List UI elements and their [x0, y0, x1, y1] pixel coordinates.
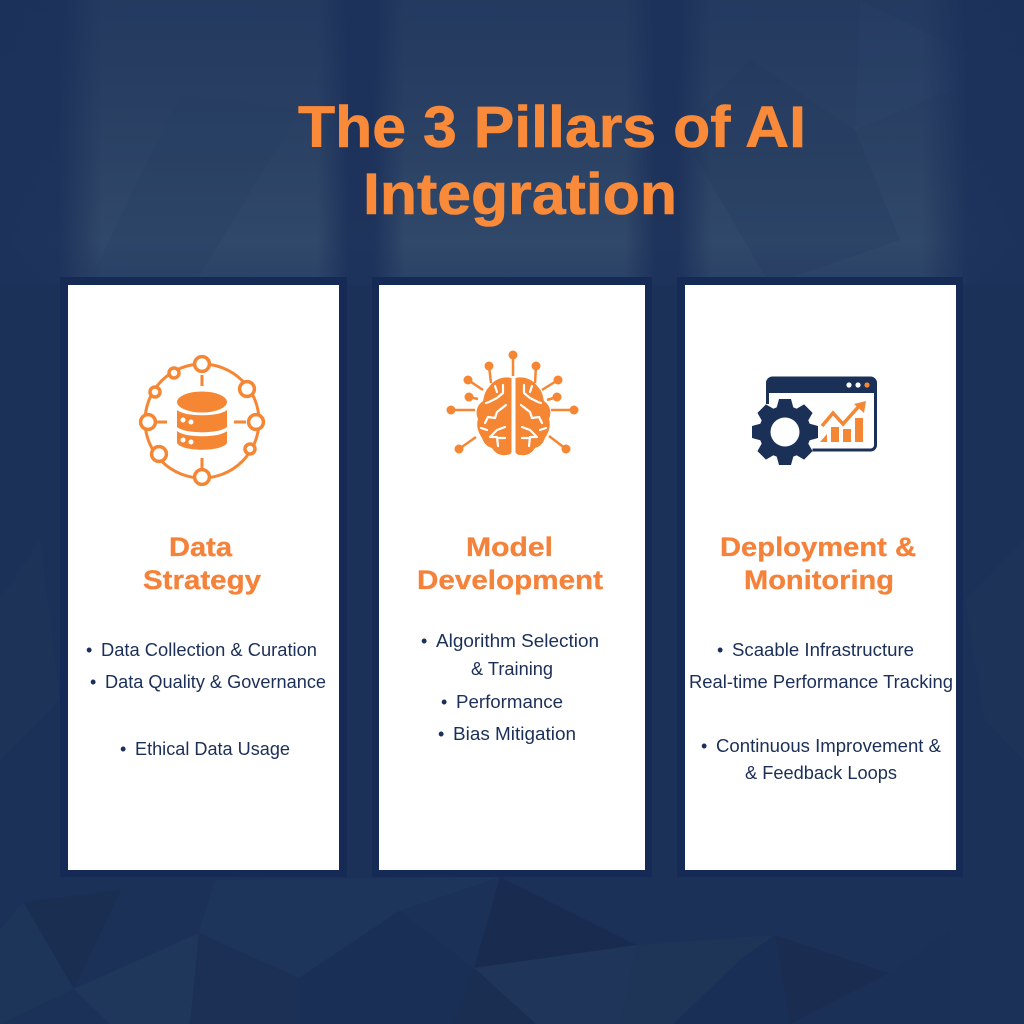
bullet list: •: [701, 736, 707, 756]
bullet list: Performance: [456, 692, 563, 712]
bullet list: Bias Mitigation: [453, 724, 576, 744]
heading: [143, 532, 261, 595]
bullet list: [689, 640, 953, 783]
title: [298, 95, 806, 227]
bullet list: •: [120, 739, 126, 759]
icon: database network: [141, 357, 263, 484]
heading: [720, 532, 916, 595]
bullet list: Data Collection & Curation: [101, 640, 317, 660]
bullet list: & Training: [471, 659, 553, 679]
heading: Deployment &: [720, 532, 916, 562]
panel: model development: [372, 277, 652, 877]
heading: Development: [417, 565, 603, 595]
bullet list: •: [90, 672, 96, 692]
title: Integration: [363, 162, 677, 227]
heading: Model: [466, 532, 553, 562]
bullet list: •: [717, 640, 723, 660]
title: The 3 Pillars of AI: [298, 95, 806, 160]
bullet list: Scaable Infrastructure: [732, 640, 914, 660]
heading: Monitoring: [744, 565, 894, 595]
bullet list: [86, 640, 326, 759]
heading: [417, 532, 603, 595]
bullet list: •: [421, 631, 427, 651]
bullet list: Continuous Improvement &: [716, 736, 941, 756]
bullet list: •: [441, 692, 447, 712]
bullet list: Data Quality & Governance: [105, 672, 326, 692]
heading: Strategy: [143, 565, 261, 595]
icon: brain with nodes: [446, 350, 578, 455]
bullet list: & Feedback Loops: [745, 763, 897, 783]
bullet list: Ethical Data Usage: [135, 739, 290, 759]
panel: data strategy: [60, 277, 347, 877]
icon: gear and dashboard window: [749, 377, 877, 468]
bullet list: [421, 631, 599, 744]
panel: deployment and monitoring: [677, 277, 963, 877]
bullet list: •: [438, 724, 444, 744]
bullet list: Real-time Performance Tracking: [689, 672, 953, 692]
bullet list: •: [86, 640, 92, 660]
heading: Data: [169, 532, 233, 562]
bullet list: Algorithm Selection: [436, 631, 599, 651]
